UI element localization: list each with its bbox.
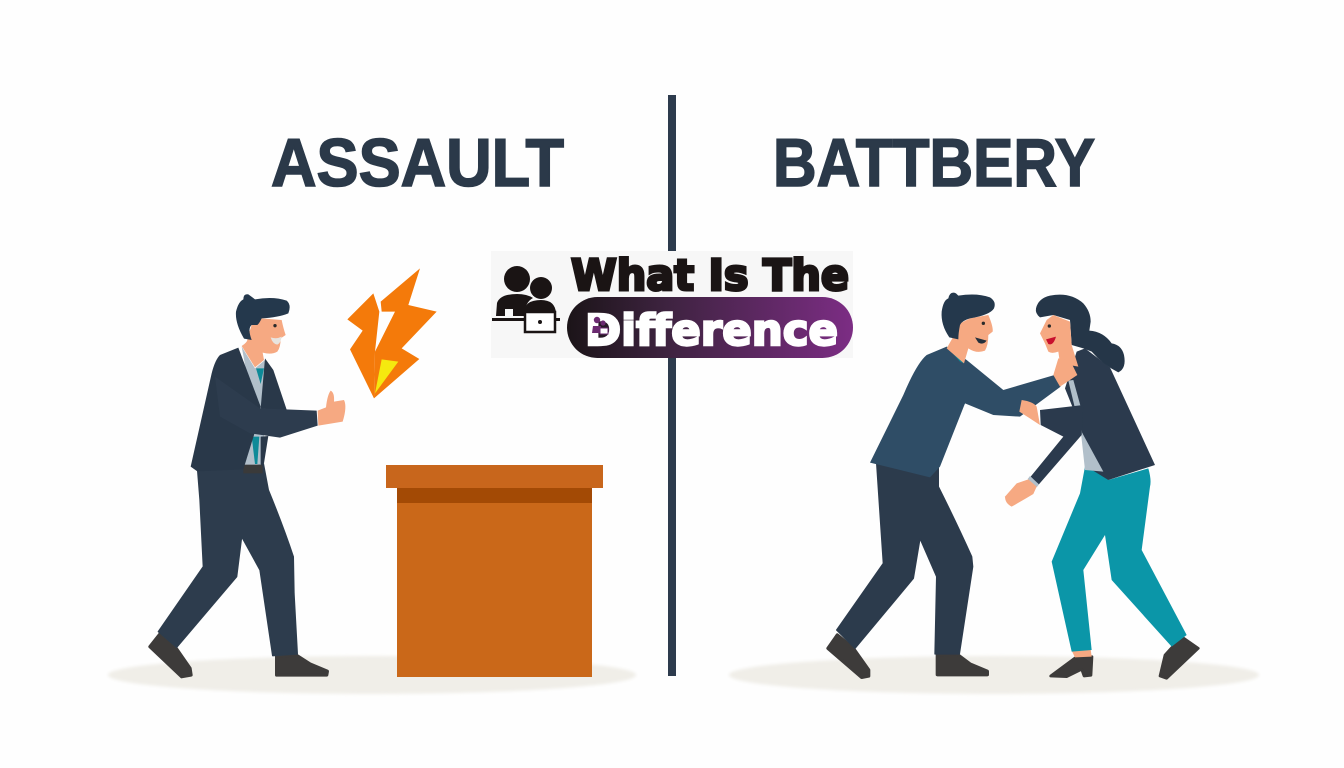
right man collar <box>947 347 964 363</box>
right man hair <box>942 293 995 339</box>
right man shoes <box>828 635 987 677</box>
badge text: what is the: What Is The <box>571 251 849 301</box>
badge pill <box>567 297 853 358</box>
woman hair and bun <box>1036 295 1125 372</box>
right man shirt <box>933 402 966 465</box>
right man face <box>947 315 993 363</box>
badge: what is the difference <box>491 251 853 358</box>
left man neck and face <box>242 318 286 367</box>
left man hair <box>236 294 290 340</box>
left man hand <box>318 391 345 426</box>
heading: battery: BATTBERY <box>773 125 1095 201</box>
ground shadow: left <box>108 656 636 694</box>
woman sleeve <box>1031 405 1083 485</box>
heading: assault: ASSAULT <box>271 125 564 201</box>
icon: orange lightning bolt <box>347 268 437 398</box>
woman lower hand <box>1005 479 1037 507</box>
woman cuff <box>1028 476 1039 487</box>
ground shadow: right <box>729 656 1259 694</box>
man's hand on woman's neck <box>1053 358 1077 387</box>
left man shirt and tie <box>242 347 265 473</box>
figure: man threatening (assault) <box>150 294 345 677</box>
woman ankle <box>1072 649 1092 657</box>
orange box / podium <box>386 465 603 677</box>
right man jacket and arm <box>870 347 1061 477</box>
woman hand on arm <box>1019 400 1040 425</box>
badge small icon <box>592 317 608 334</box>
central vertical divider <box>668 95 676 676</box>
badge text: difference: Difference <box>585 306 838 356</box>
left man sleeve <box>215 377 318 438</box>
left man trousers <box>158 463 297 656</box>
left man shoes <box>150 634 327 677</box>
left man jacket <box>191 348 261 471</box>
woman trousers <box>1052 467 1187 652</box>
right man trousers <box>837 463 973 654</box>
woman blouse <box>1068 380 1103 472</box>
figures: man grabbing woman (battery) <box>828 293 1198 678</box>
woman shoes <box>1051 637 1198 678</box>
badge icon: two people with laptop <box>492 266 560 332</box>
woman face and neck <box>1040 315 1078 367</box>
woman jacket <box>1065 348 1155 480</box>
